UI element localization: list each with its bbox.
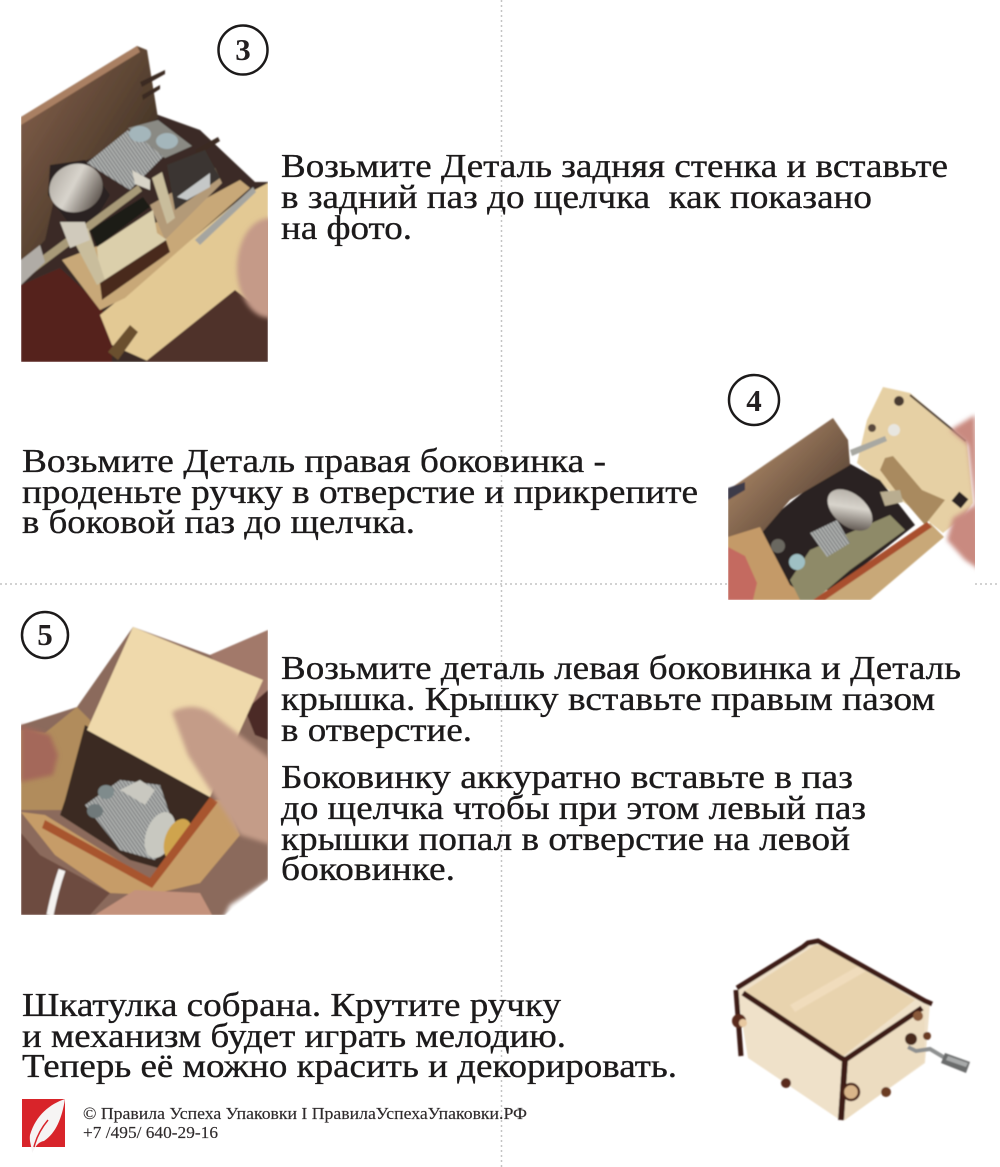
photo: assembled wooden box <box>732 940 970 1120</box>
text: final instruction: Теперь её можно красить и декорировать. <box>22 1048 677 1085</box>
text: step 5 side panel instruction: Боковинку аккуратно вставьте в паз <box>281 759 853 796</box>
footer: copyright and phone: © Правила Успеха Упаковки I ПравилаУспехаУпаковки.РФ <box>83 1104 527 1123</box>
text: step 4 instruction: в боковой паз до щелчка. <box>22 504 415 541</box>
text: step 4 instruction: проденьте ручку в отверстие и прикрепите <box>22 474 698 511</box>
number badge: 5 <box>22 612 68 658</box>
text: step 5 side panel instruction: до щелчка чтобы при этом левый паз <box>281 790 866 827</box>
text: step 4 instruction <box>22 443 698 541</box>
number badge: 3: 3 <box>235 32 251 67</box>
footer: copyright and phone <box>83 1104 527 1142</box>
photo: step 4 side panel attached <box>728 380 980 600</box>
logo: red square with leaf <box>22 1099 65 1153</box>
text: step 5 side panel instruction: боковинке. <box>281 851 455 888</box>
text: final instruction <box>22 987 677 1085</box>
footer: copyright and phone: +7 /495/ 640-29-16 <box>83 1123 218 1142</box>
number badge: 5: 5 <box>37 617 53 652</box>
text: step 3 instruction: на фото. <box>281 210 412 247</box>
number badge: 3 <box>218 26 268 74</box>
text: step 3 instruction: в задний паз до щелчка как показано <box>281 179 872 216</box>
text: step 5 lid instruction <box>281 650 961 749</box>
text: final instruction: Шкатулка собрана. Крутите ручку <box>22 987 561 1024</box>
photo: step 3 mechanism in box <box>21 45 268 362</box>
photo: step 5 lid insertion <box>21 627 272 925</box>
text: step 3 instruction: Возьмите Деталь задняя стенка и вставьте <box>281 148 948 185</box>
text: step 4 instruction: Возьмите Деталь правая боковинка - <box>22 443 606 480</box>
text: step 5 side panel instruction <box>281 759 866 888</box>
number badge: 4 <box>729 375 779 425</box>
number badge: 4: 4 <box>746 383 762 418</box>
text: final instruction: и механизм будет играть мелодию. <box>22 1018 566 1055</box>
text: step 5 lid instruction: крышка. Крышку вставьте правым пазом <box>281 681 935 718</box>
text: step 5 lid instruction: Возьмите деталь левая боковинка и Деталь <box>281 650 961 687</box>
text: step 5 side panel instruction: крышки попал в отверстие на левой <box>281 821 850 858</box>
text: step 3 instruction <box>281 148 948 247</box>
text: step 5 lid instruction: в отверстие. <box>281 712 472 749</box>
